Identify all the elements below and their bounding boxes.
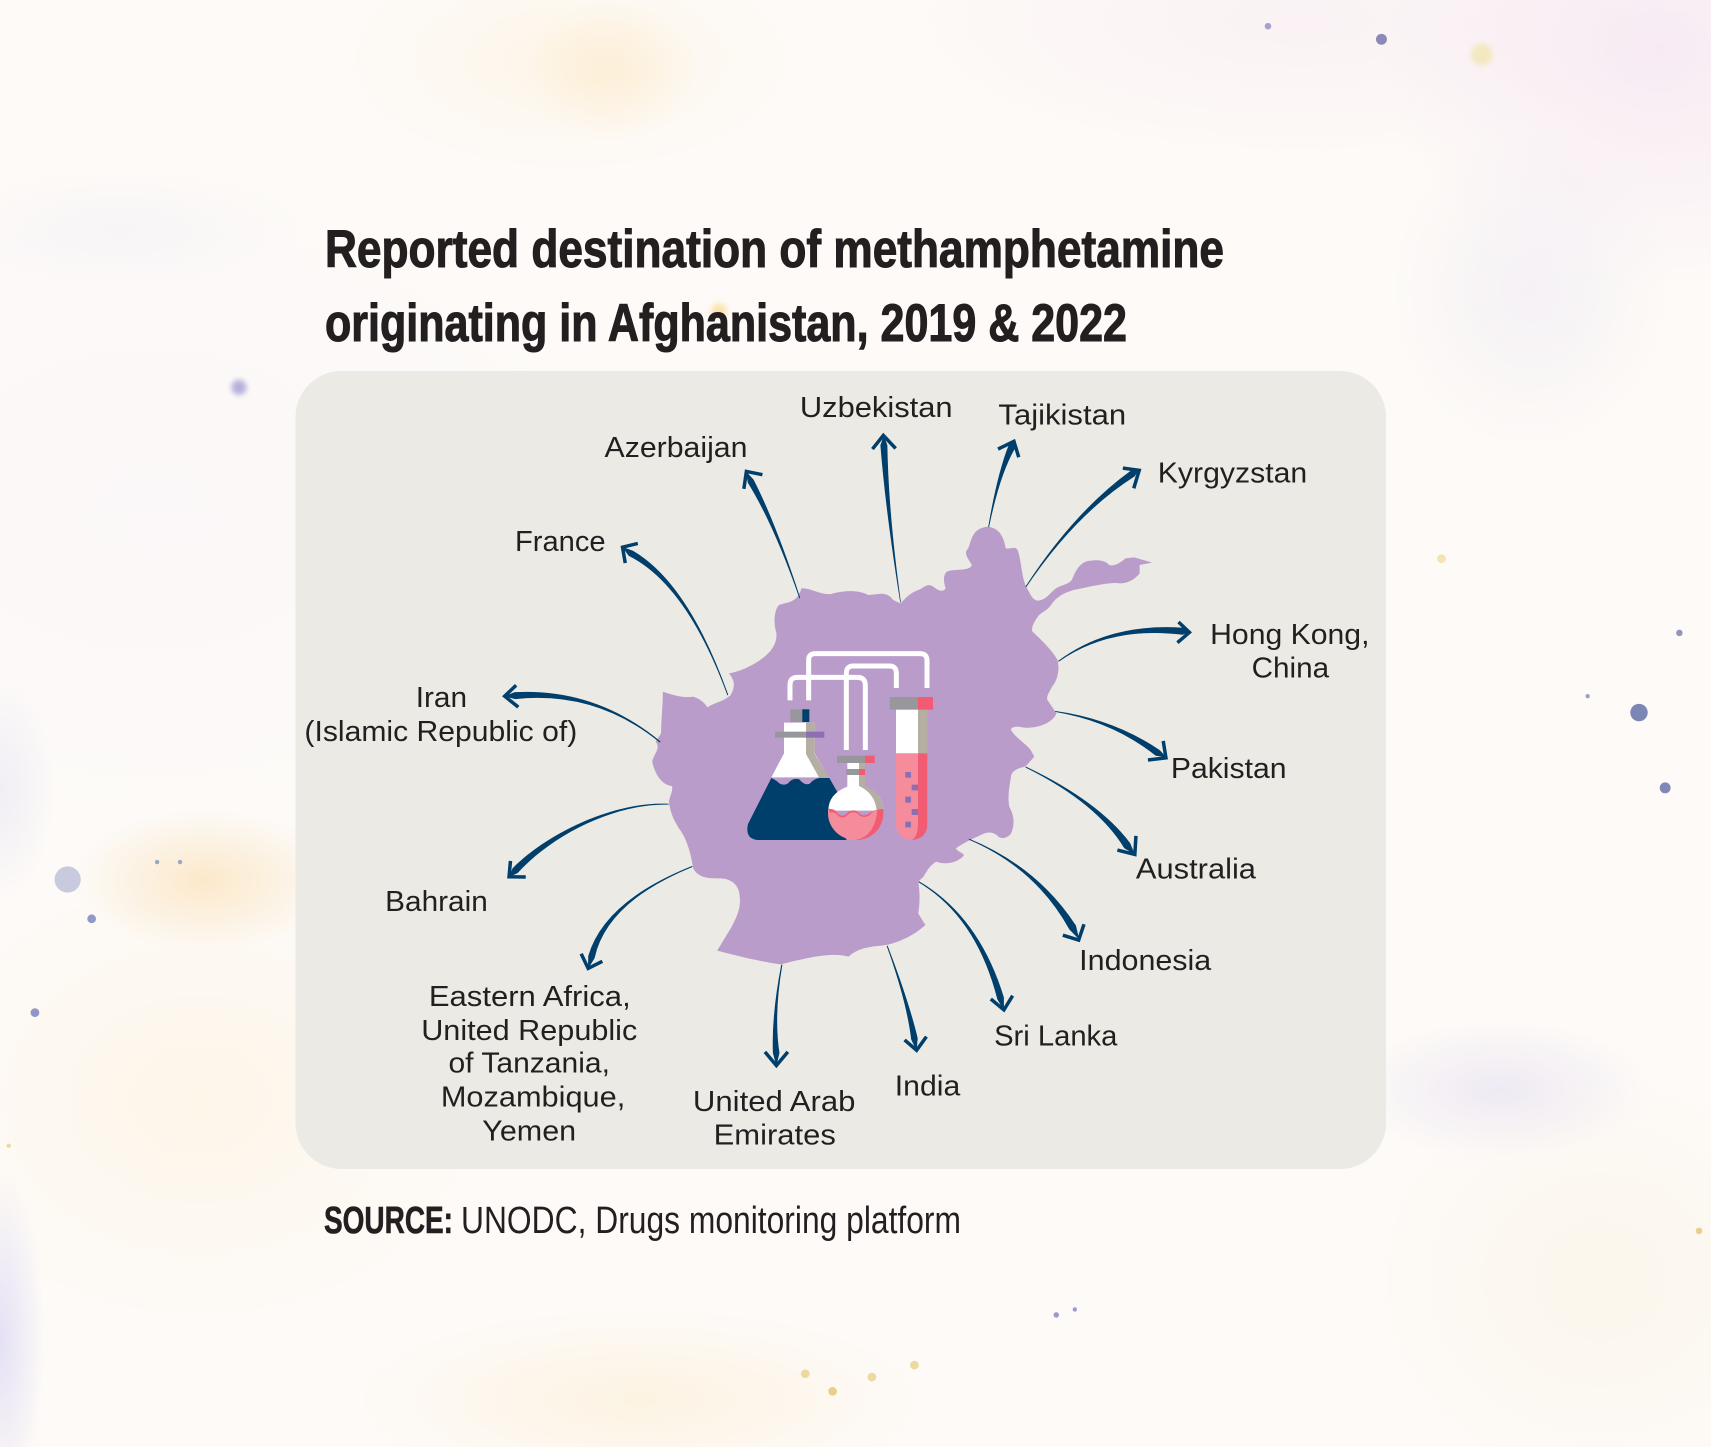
title: Reported destination of methamphetamine — [325, 220, 1224, 279]
label: Tajikistan: Tajikistan — [998, 399, 1126, 431]
label: Eastern Africa group: of Tanzania, — [448, 1048, 610, 1080]
label: India: India — [895, 1071, 961, 1103]
icon: round flask — [828, 756, 883, 840]
label: United Arab Emirates: United Arab — [693, 1086, 856, 1118]
label: Iran (Islamic Republic of): Iran — [416, 682, 467, 714]
label: Iran (Islamic Republic of): (Islamic Republic of) — [304, 716, 577, 748]
label: Eastern Africa group: Eastern Africa, — [429, 981, 631, 1013]
icon: laboratory flasks and test tube — [747, 654, 933, 840]
arrow: Pakistan — [1055, 711, 1166, 760]
arrow: India — [887, 946, 926, 1051]
label: Eastern Africa group: United Republic — [421, 1015, 637, 1047]
label: Eastern Africa group: Mozambique, — [441, 1081, 625, 1113]
label: Iran (Islamic Republic of) — [304, 682, 577, 748]
label: Sri Lanka: Sri Lanka — [994, 1020, 1118, 1052]
arrow: Australia — [1026, 767, 1136, 854]
label: Uzbekistan: Uzbekistan — [800, 392, 953, 424]
label: Bahrain: Bahrain — [385, 886, 488, 918]
label: Australia: Australia — [1136, 853, 1257, 885]
title: originating in Afghanistan, 2019 & 2022 — [325, 294, 1127, 353]
label: United Arab Emirates — [693, 1086, 856, 1152]
label: United Arab Emirates: Emirates — [714, 1120, 836, 1152]
icon: connecting tubes — [790, 654, 927, 750]
arrow: Indonesia — [969, 839, 1084, 940]
label: Eastern Africa group — [421, 981, 637, 1147]
arrow: United Arab Emirates — [765, 965, 788, 1066]
source note: SOURCE: — [324, 1200, 453, 1242]
arrow: Tajikistan — [988, 441, 1019, 527]
title — [325, 220, 1224, 353]
map: Afghanistan — [652, 527, 1152, 964]
arrow: Bahrain — [508, 804, 669, 877]
icon: test tube — [890, 697, 933, 840]
icon: conical flask — [747, 709, 847, 840]
arrows: destinations — [504, 435, 1190, 1066]
source note: UNODC, Drugs monitoring platform — [461, 1200, 961, 1242]
arrow: Uzbekistan — [872, 435, 901, 602]
arrow: Sri Lanka — [918, 881, 1013, 1010]
label: Hong Kong, China — [1210, 619, 1369, 685]
label: Hong Kong, China: Hong Kong, — [1210, 619, 1369, 651]
label: Pakistan: Pakistan — [1171, 753, 1287, 785]
label: Eastern Africa group: Yemen — [482, 1115, 576, 1147]
arrow: Kyrgyzstan — [1025, 468, 1139, 587]
arrow: Eastern Africa, Tanzania, Mozambique, Yemen — [581, 866, 693, 969]
label: Indonesia: Indonesia — [1079, 945, 1212, 977]
label: France: France — [515, 526, 606, 558]
country labels — [304, 392, 1369, 1152]
arrow: Hong Kong, China — [1058, 622, 1190, 662]
arrow: France — [622, 543, 728, 695]
label: Kyrgyzstan: Kyrgyzstan — [1158, 457, 1307, 489]
label: Hong Kong, China: China — [1252, 653, 1330, 685]
arrow: Iran — [504, 685, 661, 742]
source note — [324, 1200, 961, 1242]
panel: map background — [296, 371, 1386, 1169]
label: Azerbaijan: Azerbaijan — [605, 432, 747, 464]
arrow: Azerbaijan — [744, 471, 800, 598]
